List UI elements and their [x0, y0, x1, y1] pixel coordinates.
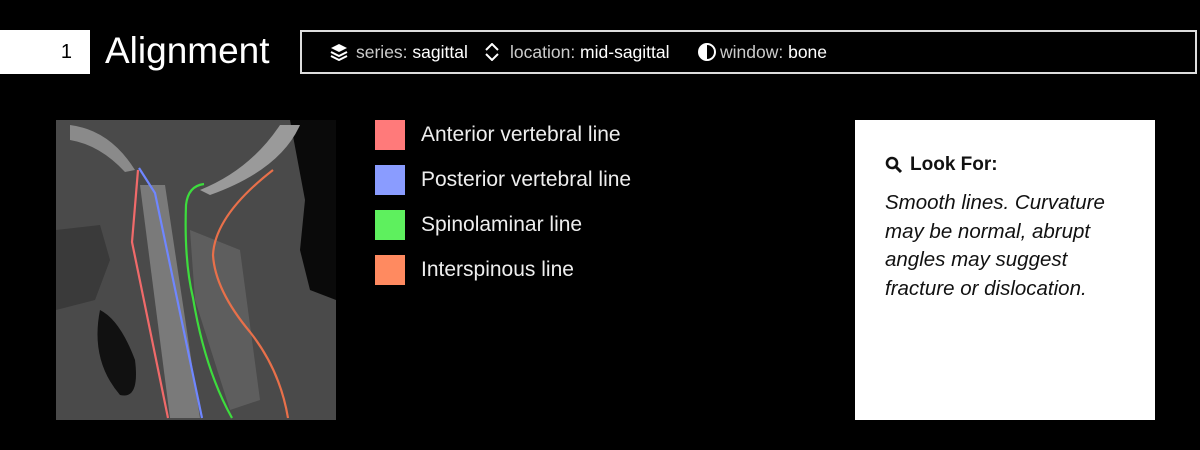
anterior line [132, 170, 168, 418]
legend: Interspinous line [421, 258, 574, 281]
legend: Posterior vertebral line [421, 168, 631, 191]
legend: spinolaminar [375, 210, 582, 240]
panel text: Smooth lines. Curvature may be normal, abrupt angles may suggest fracture or dislocation. [885, 191, 1105, 300]
interspinous line [213, 170, 288, 418]
spinolaminar line [186, 184, 232, 418]
info bar [300, 30, 1197, 74]
legend: interspinous [375, 255, 574, 285]
CT image with lines [56, 120, 336, 420]
legend [375, 120, 631, 285]
section number box: 1 [61, 41, 72, 63]
legend: posterior [375, 165, 631, 195]
title: Alignment [105, 30, 270, 71]
section number box [0, 30, 90, 74]
posterior line [139, 168, 202, 418]
legend: Spinolaminar line [421, 213, 582, 236]
legend: Anterior vertebral line [421, 123, 621, 146]
look for panel [855, 120, 1155, 420]
info: window: window: bone [720, 42, 827, 62]
info: location: location: mid-sagittal [510, 42, 670, 62]
legend: anterior [375, 120, 621, 150]
panel heading: Look For: [910, 154, 998, 175]
info: series: series: sagittal [356, 42, 468, 62]
